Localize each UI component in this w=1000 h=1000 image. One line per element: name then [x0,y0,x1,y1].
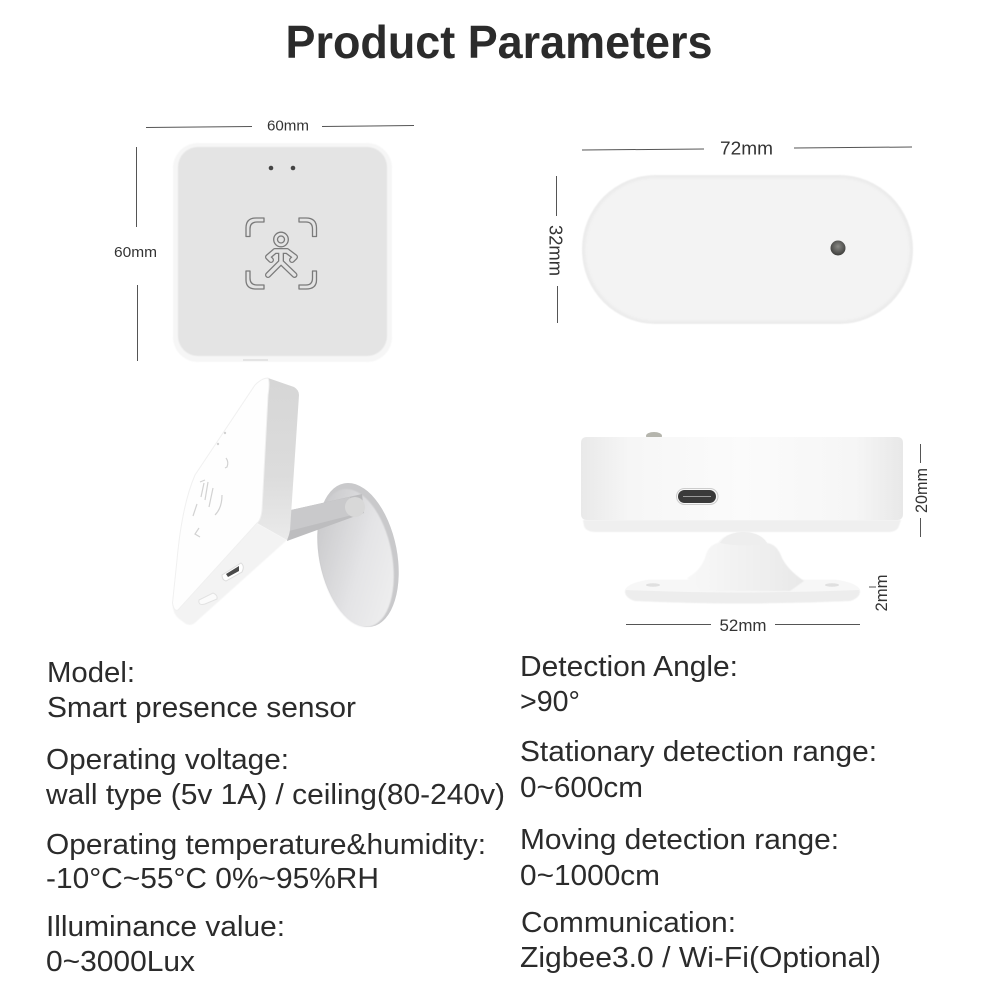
spec: stationary detection range: 0~600cm [520,772,643,804]
spec: operating temperature and humidity [46,829,486,895]
spec list: left column [45,657,505,978]
device body [172,378,299,625]
spec: moving detection range: 0~1000cm [520,860,660,892]
lens bump [646,432,662,440]
mount disc [306,476,410,634]
panel: side view with dimensions [581,432,931,635]
spec: operating voltage: wall type (5v 1A) / ceiling(80-240v) [45,779,505,811]
spec: detection angle: Detection Angle: [520,651,738,683]
width dimension 72mm: 72mm [720,138,773,158]
title: Product Parameters [286,16,712,68]
spec: model: Smart presence sensor [47,692,356,724]
spec: communication: Zigbee3.0 / Wi-Fi(Optional) [520,942,881,974]
device body side [581,437,903,532]
engraved icon on face [193,432,228,537]
spec: illuminance value [46,911,285,978]
spec: moving detection range [520,824,839,892]
device front square [173,143,392,362]
sensor lens [830,240,846,256]
usb port [222,563,243,581]
bottom side of device [173,523,287,625]
panel: angled view on wall mount [172,378,410,634]
height dimension 32mm: 32mm [546,225,566,276]
height dimension 20mm [912,444,931,537]
spec: operating temperature and humidity: Operating temperature&humidity: [46,829,486,861]
device top pill [582,175,913,324]
spec: communication [520,907,881,974]
spec: operating voltage [45,744,505,811]
spec: illuminance value: Illuminance value: [46,911,285,943]
spec: model [47,657,356,724]
height dimension 20mm: 20mm [912,468,931,513]
spec: moving detection range: Moving detection range: [520,824,839,856]
height dimension 60mm: 60mm [114,245,157,261]
spec: model: Model: [47,657,135,689]
sensor dots [269,166,295,170]
spec: operating temperature and humidity: -10°C~55°C 0%~95%RH [46,863,379,895]
spec: stationary detection range: Stationary detection range: [520,736,877,768]
mount arm [287,494,365,541]
spec: stationary detection range [520,736,877,804]
spec: detection angle: >90° [520,686,580,718]
usb-c port [676,488,718,504]
white front face [172,378,269,610]
width dimension 52mm: 52mm [720,616,766,635]
width dimension 60mm: 60mm [267,118,309,134]
icon: person in scan frame [246,218,316,289]
spec list: right column [520,651,881,974]
width dimension 72mm [582,138,912,158]
grey right edge [257,378,299,540]
button [199,593,217,604]
height dimension 2mm: 2mm [872,574,891,612]
panel: top view with dimensions [546,138,913,324]
spec: communication: Communication: [521,907,736,939]
spec: detection angle [520,651,738,718]
panel: front view with dimensions [114,118,414,362]
mount dome [687,532,804,591]
mount plate [625,580,860,604]
spec: operating voltage: Operating voltage: [46,744,289,776]
spec: illuminance value: 0~3000Lux [46,946,196,978]
